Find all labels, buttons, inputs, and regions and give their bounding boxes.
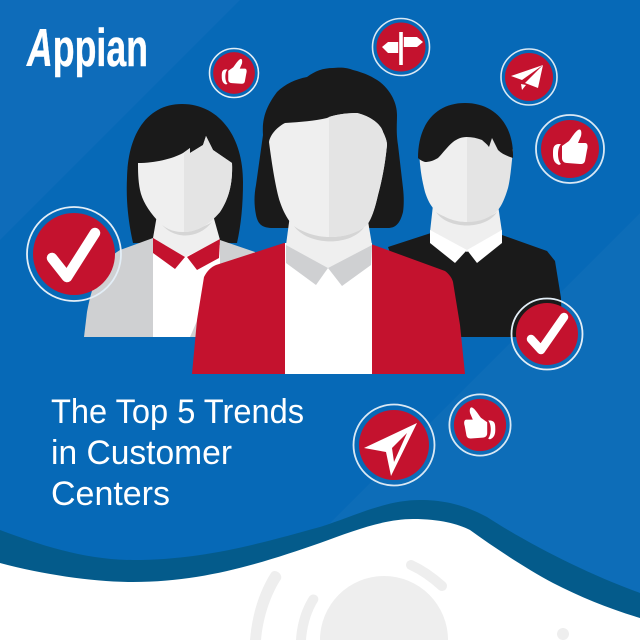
neck — [430, 205, 502, 252]
badge: right check — [512, 298, 582, 370]
person: center woman — [192, 68, 465, 374]
neck shadow — [294, 226, 365, 241]
hair — [254, 68, 404, 228]
hair — [418, 103, 513, 162]
badge: small paper plane — [501, 49, 557, 105]
sweater — [388, 233, 562, 337]
jacket — [84, 238, 268, 337]
title — [51, 393, 304, 513]
neck shadow — [160, 222, 212, 236]
face — [269, 113, 387, 237]
jacket — [192, 243, 465, 374]
neck — [153, 215, 220, 257]
wave: dark teal band — [0, 500, 640, 640]
collar — [153, 238, 185, 269]
neck — [286, 215, 372, 268]
wave: white bottom area — [0, 519, 640, 640]
neck shadow — [436, 212, 497, 226]
title: in Customer — [51, 434, 232, 472]
badge: large thumbs up — [536, 115, 604, 183]
badge: large check — [27, 207, 121, 301]
badge: small thumbs up — [210, 49, 258, 97]
title: The Top 5 Trends — [51, 393, 304, 431]
shirt — [153, 245, 220, 337]
hair — [127, 104, 243, 243]
badge: large paper plane — [354, 404, 434, 486]
badge: bottom thumbs up — [449, 394, 511, 456]
ghost icon: faint circle and arcs — [250, 565, 569, 640]
person: right man — [388, 103, 562, 337]
person: left woman — [84, 104, 268, 337]
shirt — [285, 243, 372, 374]
face — [419, 122, 467, 222]
collar — [286, 245, 328, 285]
face — [138, 136, 232, 232]
logo: Appian: Appian — [26, 19, 148, 78]
collar — [430, 230, 502, 263]
title: Centers — [51, 475, 170, 513]
badge: signpost — [372, 18, 430, 76]
